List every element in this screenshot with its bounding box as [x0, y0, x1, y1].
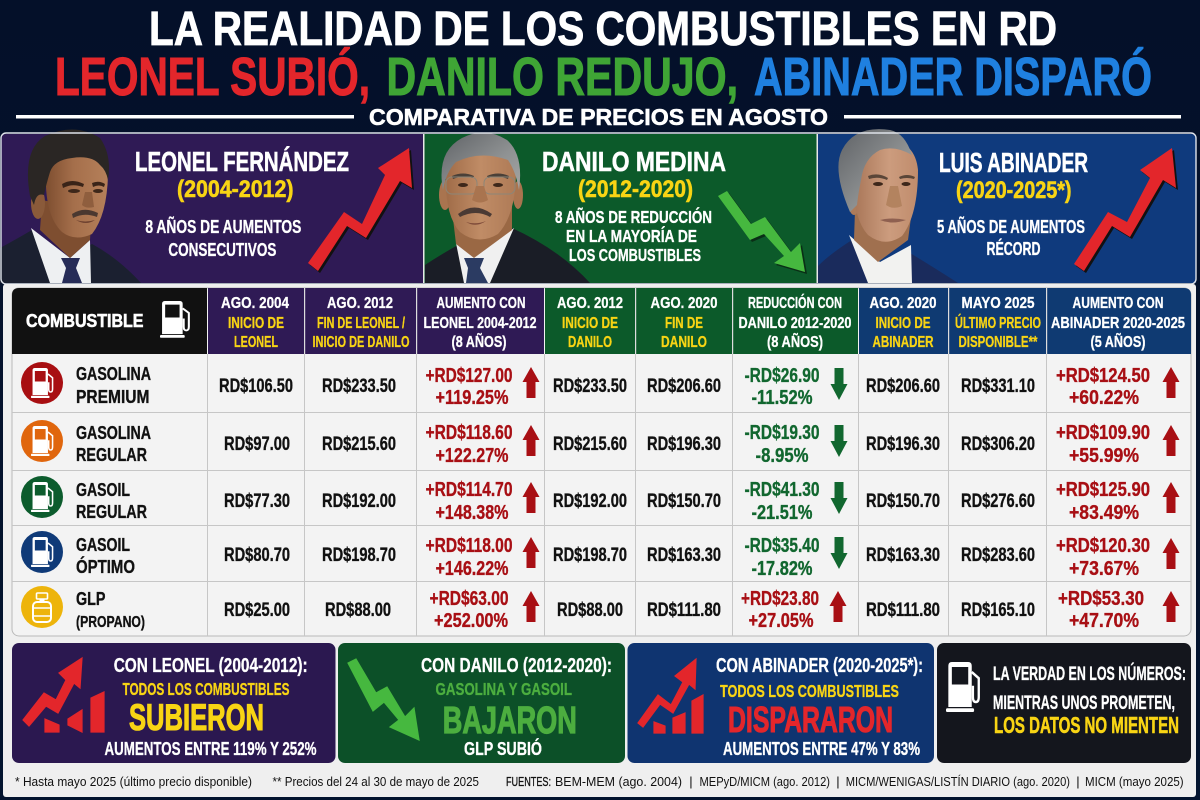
row: gasoil regular: +RD$114.70 — [426, 479, 512, 501]
row: gasolina regular: -RD$19.30 — [744, 422, 820, 444]
header: ago 2020 Danilo: DANILO — [661, 334, 707, 351]
row: gasoil regular: REGULAR — [76, 501, 147, 522]
panel: Danilo Medina: LOS COMBUSTIBLES — [569, 245, 701, 265]
panel: con Abinader summary: DISPARARON — [728, 699, 893, 740]
header: mayo 2025: MAYO 2025 — [962, 295, 1035, 312]
panel: Luis Abinader: LUIS ABINADER — [939, 147, 1088, 178]
panel: Leonel Fernández: 8 AÑOS DE AUMENTOS — [145, 216, 301, 237]
panel: con Leonel summary: CON LEONEL (2004-2012): — [114, 655, 308, 677]
panel: con Abinader summary: TODOS LOS COMBUSTIBLES — [720, 681, 899, 701]
row: gasolina premium: -11.52% — [752, 387, 813, 409]
row: gasoil óptimo: GASOIL — [76, 534, 130, 555]
row: gasolina regular: +55.99% — [1069, 445, 1139, 467]
header: reducción con Danilo: (8 AÑOS) — [767, 331, 823, 351]
header: ago 2020 Danilo — [650, 295, 718, 351]
row: GLP propano: +RD$23.80 — [741, 588, 819, 610]
row: GLP propano: RD$88.00 — [325, 600, 391, 621]
icon: blue pump — [21, 531, 63, 573]
panel: con Leonel summary: TODOS LOS COMBUSTIBLES — [122, 679, 290, 699]
panel: con Danilo summary: CON DANILO (2012-2020): — [421, 655, 612, 677]
arrow: down — [830, 425, 848, 457]
table — [12, 288, 1191, 636]
icon: falling arrow — [348, 659, 419, 740]
row: gasolina premium: +60.22% — [1069, 387, 1139, 409]
header: aumento con Abinader — [1051, 295, 1185, 351]
header: ago 2012: FIN DE LEONEL / — [317, 315, 405, 332]
arrow: down — [830, 482, 848, 514]
row: gasoil regular: RD$276.60 — [961, 491, 1035, 512]
icon: red pump — [21, 362, 63, 404]
row: gasolina premium: +RD$127.00 — [426, 365, 512, 387]
row: gasolina regular: +RD$109.90 — [1056, 422, 1150, 444]
row: GLP propano: GLP — [76, 588, 106, 609]
header: aumento con Leonel: AUMENTO CON — [436, 295, 526, 312]
header: ago 2012: INICIO DE DANILO — [312, 334, 410, 351]
panel: con Danilo summary: GASOLINA Y GASOIL — [436, 679, 572, 699]
arrow: up — [522, 591, 540, 622]
row: gasoil óptimo: -17.82% — [752, 558, 813, 580]
row: gasoil regular: GASOIL — [76, 479, 130, 500]
row: gasolina premium: RD$206.60 — [866, 376, 940, 397]
panel: con Danilo summary: BAJARON — [443, 700, 577, 742]
footer sources: MICM (mayo 2025) — [1085, 774, 1184, 789]
row: gasolina regular: RD$215.60 — [322, 434, 396, 455]
header: ago 2020 Abinader: AGO. 2020 — [870, 295, 937, 312]
row: GLP propano: RD$88.00 — [557, 600, 623, 621]
icon: rising arrow and bars — [23, 658, 104, 732]
footer sources: | — [1076, 774, 1080, 789]
row: gasolina premium: -RD$26.90 — [744, 365, 820, 387]
title: DANILO REDUJO, — [386, 48, 738, 107]
row: gasoil óptimo: +146.22% — [436, 558, 509, 580]
row: GLP propano: +47.70% — [1069, 610, 1139, 632]
panel: Leonel Fernández: LEONEL FERNÁNDEZ — [135, 146, 349, 177]
panel: con Abinader summary: AUMENTOS ENTRE 47% Y 83% — [723, 739, 920, 759]
panel: Luis Abinader: 5 AÑOS DE AUMENTOS — [937, 216, 1085, 237]
arrow: up — [1162, 425, 1180, 456]
panel: Luis Abinader: (2020-2025*) — [956, 177, 1072, 204]
header: ago 2012 Danilo: DANILO — [568, 334, 612, 351]
portrait: Leonel — [0, 129, 141, 283]
row: gasoil regular: -RD$41.30 — [744, 479, 820, 501]
row: gasolina premium: +119.25% — [436, 387, 509, 409]
header: aumento con Abinader: (5 AÑOS) — [1090, 331, 1146, 351]
row: gasolina regular: +122.27% — [436, 445, 509, 467]
row: gasoil óptimo: +RD$118.00 — [426, 535, 512, 557]
arrow: down — [830, 368, 848, 400]
row: GLP propano: +27.05% — [748, 610, 814, 632]
header: ago 2020 Abinader: ABINADER — [872, 334, 934, 351]
icon: fuel pump — [160, 301, 189, 338]
footer sources — [506, 774, 1184, 789]
panel: con Leonel summary: AUMENTOS ENTRE 119% Y 252% — [104, 739, 316, 759]
table header: COMBUSTIBLE — [26, 311, 144, 331]
panel: Danilo Medina — [424, 132, 817, 283]
row: gasoil óptimo: RD$163.30 — [866, 545, 940, 566]
panel: Danilo Medina: 8 AÑOS DE REDUCCIÓN — [555, 206, 712, 227]
icon: gas cylinder — [21, 586, 63, 628]
arrow: down — [830, 537, 848, 569]
header: ago 2004 — [221, 295, 289, 351]
arrow: up — [522, 367, 540, 398]
footer notes: * Hasta mayo 2025 (último precio disponible) — [15, 774, 252, 789]
row: gasoil óptimo: +RD$120.30 — [1056, 535, 1150, 557]
panel: Leonel Fernández: (2004-2012) — [177, 176, 294, 203]
table header — [12, 288, 1191, 354]
row: gasolina premium: RD$331.10 — [961, 376, 1035, 397]
arrow: up — [308, 148, 414, 273]
header: ago 2020 Danilo: AGO. 2020 — [650, 295, 718, 312]
row: gasolina premium: RD$206.60 — [647, 376, 721, 397]
row: gasolina premium: RD$106.50 — [219, 376, 293, 397]
panel: Danilo Medina: (2012-2020) — [578, 176, 693, 203]
header: ago 2020 Abinader — [870, 295, 937, 351]
row: gasolina premium: +RD$124.50 — [1056, 365, 1150, 387]
row: gasoil regular: RD$192.00 — [553, 491, 627, 512]
portrait: Danilo — [425, 132, 590, 283]
row: GLP propano: (PROPANO) — [76, 614, 145, 631]
title: LEONEL SUBIÓ, — [55, 47, 370, 107]
footer notes — [15, 774, 479, 789]
row: gasolina regular: REGULAR — [76, 444, 147, 465]
header: ago 2012: AGO. 2012 — [327, 295, 393, 312]
header: mayo 2025: DISPONIBLE** — [958, 334, 1038, 351]
panel: con Leonel summary — [12, 643, 336, 763]
row: gasolina regular: RD$215.60 — [553, 434, 627, 455]
row: gasoil regular: -21.51% — [752, 502, 813, 524]
row: gasoil regular: RD$192.00 — [322, 491, 396, 512]
title: LA REALIDAD DE LOS COMBUSTIBLES EN RD — [149, 3, 1057, 56]
row: gasoil regular: RD$150.70 — [866, 491, 940, 512]
icon: fuel pump — [946, 662, 979, 712]
footer sources: MEPyD/MICM (ago. 2012) — [700, 774, 830, 789]
row: gasolina regular — [21, 420, 1180, 467]
row: gasolina premium: RD$233.50 — [322, 376, 396, 397]
row: gasoil óptimo: RD$283.60 — [961, 545, 1035, 566]
row: GLP propano: +RD$53.30 — [1058, 588, 1144, 610]
panel: Luis Abinader: RÉCORD — [986, 238, 1040, 259]
row: GLP propano: RD$165.10 — [961, 600, 1035, 621]
footer notes: ** Precios del 24 al 30 de mayo de 2025 — [272, 774, 479, 789]
row: gasoil óptimo: RD$198.70 — [322, 545, 396, 566]
header: ago 2004: LEONEL — [234, 334, 278, 351]
panel: Danilo Medina: DANILO MEDINA — [542, 146, 726, 177]
footer sources: MICM/WENIGAS/LISTÍN DIARIO (ago. 2020) — [846, 774, 1070, 789]
panel: Luis Abinader — [818, 129, 1196, 283]
header: ago 2020 Abinader: INICIO DE — [876, 315, 931, 332]
portrait: Abinader — [818, 129, 958, 283]
row: gasoil regular: RD$150.70 — [647, 491, 721, 512]
panel: con Abinader summary — [628, 643, 934, 763]
header: reducción con Danilo: DANILO 2012-2020 — [738, 315, 852, 332]
arrow: up — [830, 591, 846, 622]
row: gasolina regular: RD$306.20 — [961, 434, 1035, 455]
header: ago 2012 Danilo — [557, 295, 623, 351]
panel: con Danilo summary — [338, 643, 625, 763]
arrow: up — [522, 425, 540, 456]
subtitle: COMPARATIVA DE PRECIOS EN AGOSTO — [369, 104, 828, 130]
header: reducción con Danilo — [738, 293, 852, 351]
footer sources: | — [689, 774, 693, 789]
row: gasoil regular — [21, 476, 1180, 524]
arrow: up — [522, 537, 540, 568]
header: reducción con Danilo: REDUCCIÓN CON — [748, 293, 842, 312]
footer sources: FUENTES: — [506, 774, 551, 789]
row: gasoil óptimo: ÓPTIMO — [76, 556, 135, 577]
row: gasolina premium: GASOLINA — [76, 363, 151, 384]
row: gasoil regular: RD$77.30 — [224, 491, 290, 512]
title — [55, 3, 1152, 107]
row: GLP propano: RD$25.00 — [224, 600, 290, 621]
row: gasolina regular: RD$196.30 — [647, 434, 721, 455]
row: gasolina premium: RD$233.50 — [553, 376, 627, 397]
icon: green pump — [21, 476, 63, 518]
panel: la verdad en los números — [937, 643, 1191, 763]
footer sources: BEM-MEM (ago. 2004) — [555, 774, 682, 789]
header: aumento con Leonel — [424, 295, 537, 351]
arrow: up — [1162, 367, 1180, 398]
panel: con Leonel summary: SUBIERON — [129, 697, 264, 738]
arrow: up — [1162, 538, 1180, 569]
row: GLP propano: RD$111.80 — [647, 600, 721, 621]
header: aumento con Leonel: (8 AÑOS) — [452, 331, 506, 351]
arrow: up — [1162, 591, 1180, 622]
panel: con Abinader summary: CON ABINADER (2020-2025*): — [716, 655, 923, 677]
footer sources: | — [836, 774, 840, 789]
row: gasoil óptimo: -RD$35.40 — [744, 535, 820, 557]
panel: con Danilo summary: GLP SUBIÓ — [464, 738, 542, 759]
header: ago 2020 Danilo: FIN DE — [665, 315, 703, 332]
icon: orange pump — [21, 420, 63, 462]
header: aumento con Abinader: AUMENTO CON — [1072, 295, 1164, 312]
header: mayo 2025: ÚLTIMO PRECIO — [955, 313, 1041, 332]
row: gasolina premium — [21, 362, 1180, 409]
row: gasolina regular: +RD$118.60 — [426, 422, 512, 444]
header: ago 2004: AGO. 2004 — [221, 295, 289, 312]
row: gasolina regular: RD$97.00 — [224, 434, 290, 455]
header: ago 2004: INICIO DE — [228, 315, 284, 332]
header: ago 2012 Danilo: AGO. 2012 — [557, 295, 623, 312]
row: gasoil regular: +83.49% — [1069, 502, 1139, 524]
row: gasolina regular: -8.95% — [756, 445, 809, 467]
header: aumento con Leonel: LEONEL 2004-2012 — [424, 315, 537, 332]
header: ago 2012 — [312, 295, 410, 351]
arrow: up — [522, 482, 540, 513]
row: gasolina regular: GASOLINA — [76, 422, 151, 443]
arrow: down — [718, 191, 807, 274]
row: gasolina premium: PREMIUM — [76, 386, 150, 407]
row: GLP propano — [21, 586, 1180, 632]
subtitle — [16, 104, 1181, 130]
row: gasoil óptimo: +73.67% — [1069, 558, 1139, 580]
row: gasoil regular: +148.38% — [436, 502, 509, 524]
arrow: up — [1162, 482, 1180, 513]
row: GLP propano: RD$111.80 — [866, 600, 940, 621]
lower light background — [3, 284, 1196, 797]
row: GLP propano: +RD$63.00 — [430, 588, 508, 610]
row: gasoil óptimo: RD$198.70 — [553, 545, 627, 566]
panel: Leonel Fernández: CONSECUTIVOS — [168, 240, 276, 260]
header: ago 2012 Danilo: INICIO DE — [562, 315, 618, 332]
row: gasolina regular: RD$196.30 — [866, 434, 940, 455]
panel: Danilo Medina: EN LA MAYORÍA DE — [566, 225, 697, 246]
header: mayo 2025 — [955, 295, 1041, 351]
row: GLP propano: +252.00% — [434, 610, 508, 632]
row: gasoil óptimo — [21, 531, 1180, 580]
row: gasoil regular: +RD$125.90 — [1056, 479, 1150, 501]
row: gasoil óptimo: RD$80.70 — [224, 545, 290, 566]
icon: rising arrow and bars — [638, 659, 703, 733]
arrow: up — [1074, 148, 1178, 273]
panel: Leonel Fernández — [0, 129, 423, 283]
row: gasoil óptimo: RD$163.30 — [647, 545, 721, 566]
